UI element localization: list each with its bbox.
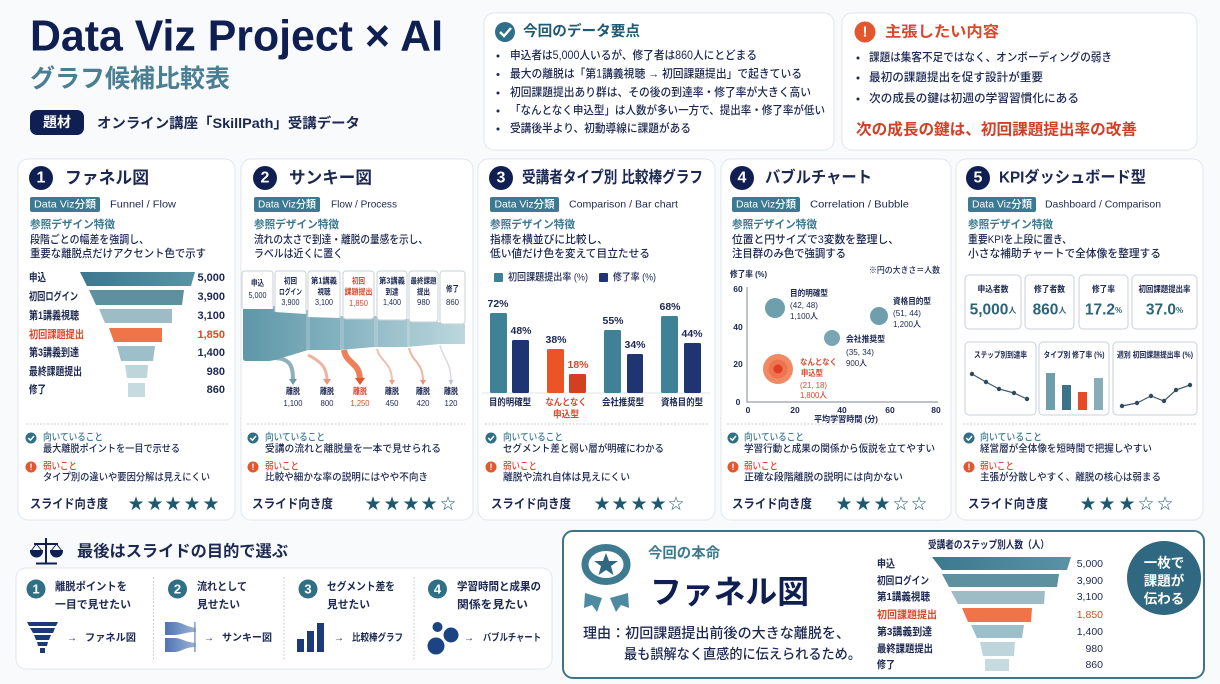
classification tag: Data Viz分類 — [258, 198, 316, 210]
design notes — [968, 217, 1161, 260]
funnel chart: 初回課題提出 — [29, 327, 84, 341]
slide suitability rating: スライド向き度 — [491, 496, 571, 511]
subtitle: グラフ候補比較表 — [30, 64, 230, 93]
funnel chart: 980 — [207, 366, 225, 378]
icon: bars — [297, 623, 324, 652]
final funnel chart: 修了 — [877, 658, 895, 671]
bubble chart: 20 — [790, 405, 800, 415]
strengths and weaknesses: 比較や細かな率の説明にはやや不向き — [265, 470, 428, 484]
panel: 5 KPI dashboard — [956, 159, 1203, 520]
stage labels: 申込 — [251, 278, 264, 288]
grouped bar chart — [482, 270, 710, 420]
strengths and weaknesses — [26, 430, 210, 484]
panel: purpose selector — [16, 568, 552, 669]
classification tag: Dashboard / Comparison — [1045, 198, 1161, 210]
KPI tiles: 860人 — [1033, 302, 1066, 318]
stage labels: 980 — [417, 297, 430, 307]
grouped bar chart: 目的明確型 — [489, 396, 531, 408]
bubble chart: なんとなく — [800, 357, 837, 367]
strengths and weaknesses: 向いていること — [744, 430, 804, 444]
icon: funnel — [27, 622, 58, 653]
design notes — [732, 217, 899, 260]
funnel chart: 3,900 — [197, 291, 225, 303]
strengths and weaknesses: ! — [732, 462, 734, 472]
bullet list: 最大の離脱は「第1講義視聴 → 初回課題提出」で起きている — [510, 66, 802, 80]
classification tag: Data Viz分類 — [34, 198, 97, 210]
dropout labels — [284, 386, 458, 408]
dropout labels: 離脱 — [320, 386, 334, 396]
label: top pick: 今回の本命 — [648, 544, 720, 562]
option 4: 学習時間と成果の — [457, 579, 541, 593]
grouped bar chart: 資格目的型 — [661, 396, 703, 408]
grouped bar chart: 68% — [659, 301, 681, 313]
stage labels: 5,000 — [248, 290, 267, 300]
strengths and weaknesses: 弱いこと — [503, 460, 537, 472]
design notes: 位置と円サイズで3変数を整理し、 — [732, 232, 899, 246]
design notes: 重要KPIを上段に置き、 — [968, 232, 1072, 246]
strengths and weaknesses: 受講の流れと離脱量を一本で見せられる — [265, 442, 441, 455]
grouped bar chart: 72% — [487, 298, 509, 310]
bubble chart: 1,200人 — [893, 319, 921, 329]
grouped bar chart: 18% — [567, 359, 589, 371]
panel: 4 bubble chart — [721, 159, 951, 520]
card title: サンキー図 — [289, 168, 372, 188]
funnel chart — [29, 270, 225, 397]
grouped bar chart: 44% — [681, 328, 703, 340]
key message: 次の成長の鍵は、初回課題提出率の改善 — [856, 120, 1137, 138]
classification tag — [254, 197, 397, 212]
icon: balance scale — [31, 538, 62, 564]
stage labels: 初回 — [352, 276, 365, 286]
bubble chart — [730, 265, 941, 424]
strengths and weaknesses: ! — [968, 462, 970, 472]
funnel chart: 860 — [207, 384, 225, 396]
option 1: ファネル図 — [85, 632, 136, 644]
strengths and weaknesses — [248, 430, 441, 484]
bullet list: 初回課題提出あり群は、その後の到達率・修了率が大きく高い — [510, 85, 811, 99]
funnel chart: 第1講義視聴 — [29, 308, 79, 322]
stage labels: 860 — [446, 297, 459, 307]
strengths and weaknesses: 最大離脱ポイントを一目で示せる — [43, 442, 180, 455]
design notes: ラベルは近くに置く — [254, 246, 343, 260]
KPI tiles: 5,000人 — [970, 302, 1016, 318]
classification tag: Correlation / Bubble — [810, 198, 909, 210]
strengths and weaknesses: 弱いこと — [980, 460, 1014, 472]
claim bullets — [856, 50, 1112, 105]
mini charts: ステップ別到達率 — [974, 350, 1027, 360]
number badge 3: 3 — [497, 170, 506, 186]
option 2 — [165, 579, 272, 652]
design notes: 重要な離脱点だけアクセント色で示す — [30, 246, 206, 260]
icon: sankey — [165, 622, 196, 652]
number badge 5 — [966, 166, 990, 190]
classification tag: Flow / Process — [331, 198, 397, 210]
bubble chart: 40 — [733, 322, 743, 332]
bullet list — [496, 48, 825, 135]
panel: 3 bar chart — [478, 159, 715, 520]
classification tag — [968, 197, 1161, 212]
bubble chart: 修了率 (%) — [730, 269, 767, 279]
option 4: 4 — [434, 582, 442, 596]
strengths and weaknesses: 経営層が全体像を短時間で把握しやすい — [980, 442, 1152, 455]
classification tag: Funnel / Flow — [110, 198, 176, 210]
design notes: 低い値だけ色を変えて目立たせる — [490, 246, 650, 260]
panel: data key points — [484, 13, 834, 150]
panel: main claim — [842, 13, 1197, 150]
funnel chart: 1,400 — [197, 347, 225, 359]
bubble chart: 60 — [885, 405, 895, 415]
badge: one slide conveys the issue — [1127, 541, 1201, 615]
design notes: 参照デザイン特徴 — [30, 217, 115, 231]
classification tag: Comparison / Bar chart — [569, 198, 678, 210]
badge: one slide conveys the issue: 一枚で — [1144, 554, 1184, 570]
design notes: 注目群のみ色で強調する — [732, 246, 846, 260]
final funnel chart: 受講者のステップ別人数（人） — [928, 538, 1049, 551]
sankey chart — [242, 271, 465, 408]
strengths and weaknesses: 離脱や流れ自体は見えにくい — [503, 470, 630, 484]
card title: ファネル図 — [65, 168, 149, 188]
final funnel chart: 初回ログイン — [877, 574, 929, 587]
number badge 1: 1 — [37, 170, 46, 186]
option 4: 関係を見たい — [457, 597, 528, 611]
strengths and weaknesses: ! — [490, 462, 492, 472]
funnel chart: 申込 — [29, 270, 46, 284]
bubble chart: (35, 34) — [846, 347, 874, 357]
option 3 — [297, 579, 403, 652]
legend: 初回課題提出率 (%) — [508, 270, 588, 284]
strengths and weaknesses: 弱いこと — [744, 460, 778, 472]
option 1: → — [67, 632, 77, 644]
bubble chart: 1,100人 — [790, 311, 818, 321]
classification tag — [732, 197, 909, 212]
strengths and weaknesses — [964, 430, 1161, 484]
funnel chart: 5,000 — [197, 272, 225, 284]
strengths and weaknesses: 向いていること — [265, 430, 325, 444]
funnel chart: 1,850 — [197, 329, 225, 341]
funnel chart: 初回ログイン — [29, 289, 78, 303]
grouped bar chart: なんとなく — [546, 398, 586, 408]
bubble chart: 1,800人 — [800, 390, 827, 400]
bullet list: 申込者は5,000人いるが、修了者は860人にとどまる — [510, 48, 757, 62]
design notes: 参照デザイン特徴 — [732, 217, 817, 231]
KPI tiles: 37.0% — [1146, 302, 1183, 318]
option 1: 離脱ポイントを — [55, 579, 127, 593]
icon: bubbles — [428, 622, 458, 654]
panel: recommendation — [563, 531, 1204, 678]
bubble chart: (21, 18) — [800, 380, 827, 390]
title: Data Viz Project × AI — [30, 12, 443, 60]
design notes — [30, 217, 206, 260]
strengths and weaknesses — [486, 430, 664, 484]
stage labels: 到達 — [386, 286, 398, 296]
stage labels: ログイン — [279, 286, 302, 296]
strengths and weaknesses: セグメント差と弱い層が明確にわかる — [503, 442, 664, 455]
dropout labels: 1,250 — [350, 398, 370, 408]
strengths and weaknesses: 向いていること — [980, 430, 1042, 444]
bubble chart: 目的明確型 — [790, 288, 828, 298]
option 1: 一目で見せたい — [55, 598, 131, 611]
strengths and weaknesses: ! — [30, 462, 32, 472]
final funnel chart: 980 — [1085, 643, 1103, 655]
KPI tiles — [965, 275, 1197, 329]
strengths and weaknesses: 向いていること — [503, 430, 563, 444]
legend — [494, 270, 656, 284]
strengths and weaknesses: 正確な段階離脱の説明には向かない — [744, 470, 903, 484]
strengths and weaknesses: 向いていること — [43, 430, 103, 444]
dropout labels: 800 — [320, 398, 334, 408]
stage labels: 第1講義 — [311, 276, 337, 286]
mini charts: 週別 初回課題提出率 (%) — [1117, 350, 1193, 360]
heading: main claim: 主張したい内容 — [885, 22, 999, 40]
stage labels: 初回 — [284, 276, 297, 286]
option 2: サンキー図 — [222, 632, 272, 644]
final funnel chart: 3,100 — [1077, 591, 1103, 603]
number badge 2: 2 — [261, 170, 270, 186]
KPI tiles: 修了者数 — [1034, 284, 1065, 294]
bubble chart: 申込型 — [801, 368, 823, 378]
design notes: 小さな補助チャートで全体像を整理する — [968, 246, 1161, 260]
panel: 2 sankey — [241, 159, 473, 520]
final funnel chart: 1,850 — [1077, 609, 1103, 621]
grouped bar chart: 48% — [510, 325, 532, 337]
subject tag: 題材 — [43, 114, 71, 130]
subject text: オンライン講座「SkillPath」受講データ — [97, 115, 360, 131]
bullet list: 「なんとなく申込型」は人数が多い一方で、提出率・修了率が低い — [510, 103, 825, 117]
slide suitability rating — [491, 493, 685, 515]
slide suitability rating: スライド向き度 — [968, 496, 1048, 511]
icon: check — [495, 22, 515, 42]
reason text: 最も誤解なく直感的に伝えられるため。 — [624, 646, 861, 662]
grouped bar chart: 会社推奨型 — [602, 396, 644, 408]
design notes: 参照デザイン特徴 — [254, 217, 339, 231]
design notes — [254, 217, 428, 260]
icon: exclamation: ! — [862, 24, 868, 40]
funnel chart: 修了 — [29, 382, 46, 396]
slide suitability rating: ★★★☆☆ — [835, 493, 928, 515]
final funnel chart: 5,000 — [1077, 558, 1103, 570]
stage labels: 提出 — [417, 286, 430, 296]
slide suitability rating: スライド向き度 — [732, 496, 812, 511]
slide suitability rating — [30, 493, 220, 515]
KPI tiles: 初回課題提出率 — [1138, 284, 1191, 294]
subject tag — [30, 110, 84, 135]
heading: funnel chart: ファネル図 — [650, 574, 809, 610]
mini charts: タイプ別 修了率 (%) — [1044, 350, 1105, 360]
grouped bar chart: 55% — [602, 315, 624, 327]
option 3: → — [334, 632, 344, 644]
dropout labels: 120 — [444, 398, 458, 408]
bubble chart: 40 — [837, 405, 847, 415]
dropout labels: 450 — [386, 398, 399, 408]
design notes: 参照デザイン特徴 — [968, 217, 1053, 231]
slide suitability rating — [968, 493, 1174, 515]
bubble chart: 資格目的型 — [893, 296, 931, 306]
grouped bar chart: 申込型 — [553, 408, 579, 420]
funnel chart: 最終課題提出 — [29, 364, 82, 378]
heading: data key points: 今回のデータ要点 — [523, 22, 641, 40]
dropout labels: 離脱 — [286, 386, 300, 396]
final funnel chart: 初回課題提出 — [877, 608, 937, 621]
stage labels: 3,100 — [315, 297, 333, 307]
funnel chart: 第3講義到達 — [29, 345, 79, 359]
number badge 3 — [489, 166, 513, 190]
final funnel chart: 第1講義視聴 — [877, 590, 930, 603]
option 2: 流れとして — [197, 579, 247, 593]
stage labels: 第3講義 — [379, 276, 405, 286]
classification tag: Data Viz分類 — [972, 198, 1032, 210]
design notes: 指標を横並びに比較し、 — [490, 232, 608, 246]
option 1: 1 — [32, 582, 40, 596]
slide suitability rating: ★★★★☆ — [364, 493, 457, 515]
bubble chart: (42, 48) — [790, 300, 818, 310]
option 2: → — [204, 632, 214, 644]
strengths and weaknesses: 弱いこと — [43, 460, 77, 472]
dropout labels: 離脱 — [353, 386, 367, 396]
bubble chart: 900人 — [846, 358, 867, 368]
option 3: 3 — [304, 582, 312, 596]
strengths and weaknesses — [728, 430, 935, 484]
dropout labels: 離脱 — [385, 386, 399, 396]
strengths and weaknesses: 弱いこと — [265, 460, 299, 472]
design notes: 参照デザイン特徴 — [490, 217, 575, 231]
KPI tiles: 修了率 — [1092, 284, 1115, 294]
strengths and weaknesses: ! — [252, 462, 254, 472]
stage labels: 修了 — [446, 284, 459, 294]
strengths and weaknesses: 主張が分散しやすく、離脱の核心は弱まる — [980, 470, 1161, 484]
strengths and weaknesses: タイプ別の違いや要因分解は見えにくい — [43, 470, 210, 484]
option 4: → — [464, 632, 474, 644]
slide suitability rating: ★★★★★ — [127, 493, 220, 515]
bubble chart: (51, 44) — [893, 308, 921, 318]
final funnel chart: 最終課題提出 — [877, 642, 933, 655]
badge: one slide conveys the issue: 課題が — [1144, 572, 1185, 588]
option 2: 見せたい — [197, 598, 240, 611]
mini charts — [965, 342, 1197, 415]
card title: バブルチャート — [765, 168, 872, 186]
final funnel chart: 第3講義到達 — [877, 625, 932, 638]
number badge 1 — [29, 166, 53, 190]
bullet list: 受講後半より、初動導線に課題がある — [510, 121, 691, 135]
slide suitability rating: ★★★☆☆ — [1079, 493, 1174, 515]
legend: 修了率 (%) — [613, 270, 656, 284]
final funnel chart: 860 — [1085, 659, 1103, 671]
card title: 受講者タイプ別 比較棒グラフ — [522, 168, 703, 186]
dropout labels: 420 — [416, 398, 430, 408]
design notes: 流れの太さで到達・離脱の量感を示し、 — [254, 232, 428, 246]
number badge 4 — [730, 166, 754, 190]
bubble chart: 会社推奨型 — [846, 334, 885, 344]
icon: exclamation — [854, 22, 876, 42]
option 2: 2 — [174, 582, 181, 596]
slide suitability rating — [252, 493, 457, 515]
dropout labels: 離脱 — [416, 386, 430, 396]
classification tag: Data Viz分類 — [494, 198, 555, 210]
KPI tiles: 申込者数 — [978, 284, 1009, 294]
reason text: 理由：初回課題提出前後の大きな離脱を、 — [583, 625, 850, 641]
classification tag — [490, 197, 678, 212]
option 3: 比較棒グラフ — [352, 630, 403, 644]
icon: award ribbon — [584, 548, 629, 612]
slide suitability rating: スライド向き度 — [252, 496, 333, 511]
stage labels: 1,850 — [349, 298, 368, 308]
bubble chart: 80 — [931, 405, 941, 415]
reason text — [583, 625, 861, 662]
dropout labels: 1,100 — [284, 398, 303, 408]
grouped bar chart: 38% — [545, 334, 567, 346]
dropout labels: 離脱 — [444, 386, 458, 396]
stage labels: 課題提出 — [344, 286, 372, 296]
bubble chart: 0 — [736, 397, 741, 407]
final funnel chart: 3,900 — [1077, 575, 1103, 587]
funnel chart: 3,100 — [197, 310, 225, 322]
design notes: 段階ごとの幅差を強調し、 — [30, 232, 149, 246]
bubble chart: 60 — [733, 284, 743, 294]
option 4: バブルチャート — [483, 630, 541, 644]
bubble chart: ※円の大きさ＝人数 — [869, 265, 940, 275]
final funnel chart: 1,400 — [1077, 626, 1103, 638]
claim bullets: 最初の課題提出を促す設計が重要 — [869, 70, 1043, 84]
stage labels: 3,900 — [282, 297, 300, 307]
final funnel chart — [877, 538, 1103, 671]
bubble chart: 20 — [733, 359, 743, 369]
number badge 2 — [253, 166, 277, 190]
stage labels: 視聴 — [318, 286, 330, 296]
panel: 1 funnel — [18, 159, 235, 520]
claim bullets: 次の成長の鍵は初週の学習習慣化にある — [869, 91, 1079, 105]
grouped bar chart: 34% — [624, 339, 646, 351]
stage labels: 最終課題 — [410, 276, 436, 286]
option 3: 見せたい — [327, 598, 370, 611]
design notes — [490, 217, 650, 260]
stage labels — [242, 271, 465, 324]
classification tag: Data Viz分類 — [736, 198, 796, 210]
card title: KPIダッシュボード型 — [999, 168, 1146, 186]
badge: one slide conveys the issue: 伝わる — [1144, 592, 1184, 606]
classification tag — [30, 197, 176, 212]
heading: choose by purpose: 最後はスライドの目的で選ぶ — [77, 542, 288, 560]
final funnel chart: 申込 — [877, 557, 895, 570]
option 3: セグメント差を — [327, 579, 395, 593]
slide suitability rating — [732, 493, 928, 515]
bubble chart: 平均学習時間 (分) — [814, 414, 878, 424]
claim bullets: 課題は集客不足ではなく、オンボーディングの弱き — [869, 50, 1112, 64]
KPI tiles: 17.2% — [1085, 302, 1122, 318]
number badge 4: 4 — [738, 170, 747, 186]
slide suitability rating: ★★★★☆ — [593, 493, 685, 515]
option 1 — [26, 579, 136, 653]
slide suitability rating: スライド向き度 — [30, 496, 108, 511]
number badge 5: 5 — [974, 170, 983, 186]
bubble chart: 0 — [746, 405, 751, 415]
strengths and weaknesses: 学習行動と成果の関係から仮説を立てやすい — [744, 442, 935, 455]
stage labels: 1,400 — [383, 297, 401, 307]
option 4 — [428, 579, 541, 654]
